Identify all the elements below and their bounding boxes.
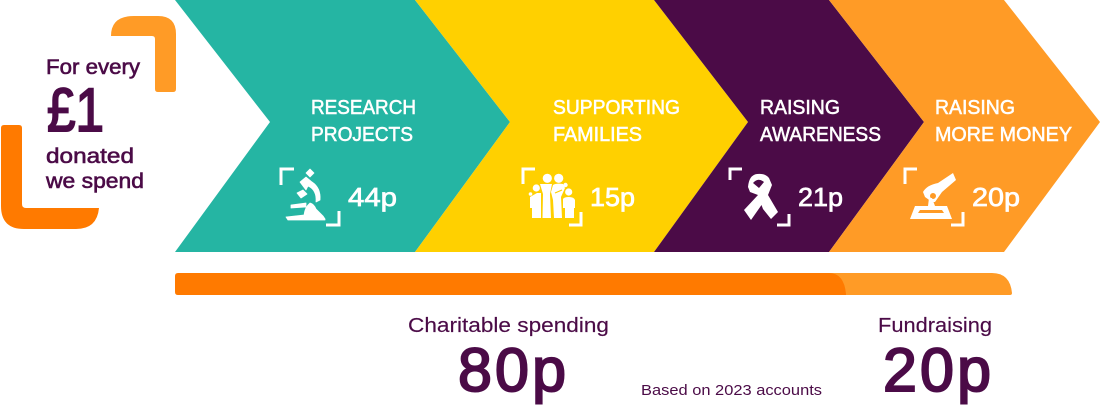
panel: raising more money	[829, 0, 1100, 252]
icon: microscope	[281, 169, 339, 225]
value: 20p: 20p	[883, 336, 991, 404]
heading: supporting families: FAMILIES	[553, 124, 642, 146]
label: fundraising	[878, 315, 992, 404]
text: pound amount: £1	[47, 76, 104, 144]
icon: donation box	[905, 169, 963, 225]
text: for every: For every	[46, 56, 141, 79]
heading: raising more money: RAISING	[935, 97, 1015, 119]
chevron: purple	[654, 0, 924, 252]
text: donated: donated	[46, 145, 134, 168]
text: we spend: we spend	[45, 170, 144, 193]
chevron: teal	[175, 0, 510, 252]
note: based on 2023 accounts: Based on 2023 accounts	[641, 382, 822, 399]
text: charitable spending: Charitable spending	[408, 315, 609, 337]
heading: supporting families: SUPPORTING	[553, 97, 680, 119]
text: fundraising: Fundraising	[878, 315, 992, 337]
chevron: orange	[829, 0, 1100, 252]
panel: supporting families	[415, 0, 748, 252]
label: charitable spending	[408, 315, 609, 404]
chart: spending bar	[175, 273, 1012, 295]
bar: charitable	[175, 273, 846, 295]
chevron: yellow	[415, 0, 748, 252]
heading: raising more money: MORE MONEY	[935, 124, 1072, 146]
bar: fundraising	[800, 273, 1012, 295]
heading: research projects: PROJECTS	[311, 124, 413, 146]
value: 21p: 21p	[798, 182, 843, 212]
panel: raising awareness	[654, 0, 924, 252]
value: 20p: 20p	[972, 182, 1020, 212]
panel: intro	[1, 16, 176, 229]
panel: research projects	[175, 0, 510, 252]
icon: ribbon	[730, 169, 789, 225]
value: 15p: 15p	[590, 182, 635, 212]
heading: research projects: RESEARCH	[311, 97, 416, 119]
bracket: bottom left	[1, 125, 99, 229]
value: 44p: 44p	[348, 182, 397, 212]
value: 80p: 80p	[458, 336, 566, 404]
heading: raising awareness: AWARENESS	[760, 124, 881, 146]
bracket: top right	[111, 16, 176, 92]
heading: raising awareness: RAISING	[760, 97, 840, 119]
icon: family	[523, 169, 581, 225]
